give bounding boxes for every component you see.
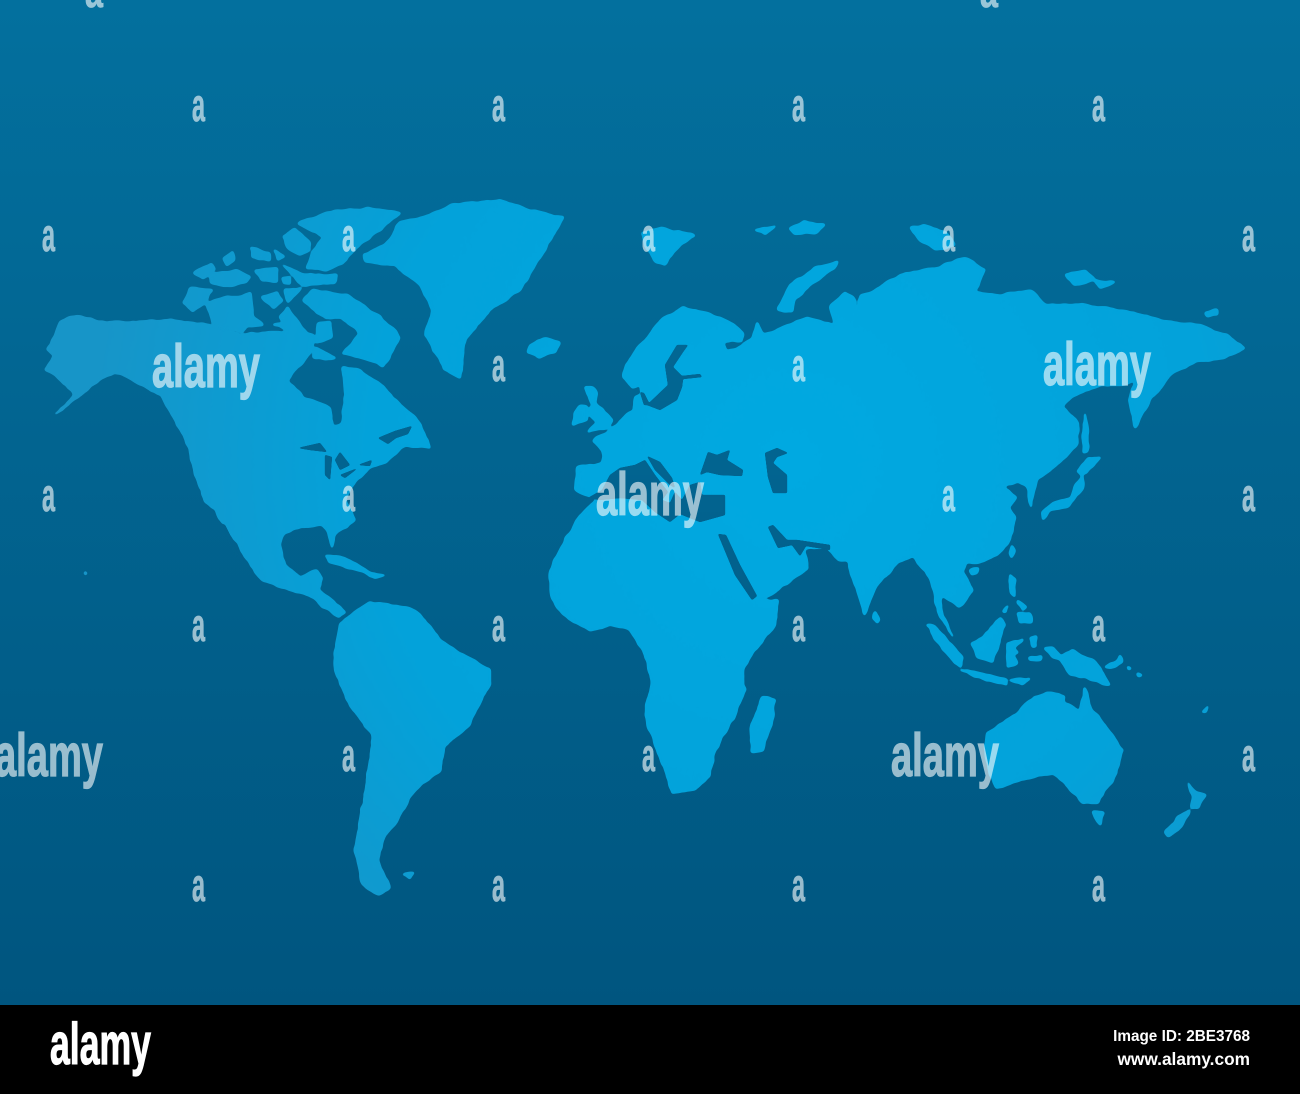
watermark: small repeated letters: a (642, 209, 655, 261)
island: Greenland (363, 200, 563, 378)
water: Gulf of St Lawrence (378, 426, 412, 444)
continent: North America (45, 307, 430, 618)
island: Tasmania (1092, 812, 1105, 825)
watermark: small repeated letters: a (342, 469, 355, 521)
water: Baltic Sea (647, 345, 702, 410)
watermark: small repeated letters: a (1242, 469, 1255, 521)
watermark: small repeated letters: a (792, 599, 805, 651)
water: Adriatic Sea (647, 456, 675, 488)
watermark: small repeated letters: a (42, 469, 55, 521)
watermark: small repeated letters: a (792, 859, 805, 911)
water: Caspian Sea (765, 448, 788, 493)
watermark: small repeated letters: a (1242, 209, 1255, 261)
watermark: small repeated letters: a (1242, 729, 1255, 781)
continent: South America (335, 602, 490, 895)
watermark: small repeated letters: a (192, 79, 205, 131)
watermark: large alamy logos: alamy (596, 461, 704, 528)
water: Kattegat (640, 392, 650, 405)
continent: Africa (550, 497, 778, 793)
watermark: small repeated letters: a (492, 599, 505, 651)
water: Great Lakes (298, 443, 372, 480)
islands: Arctic Eurasia (642, 222, 1218, 316)
watermark: large alamy logos: alamy (891, 722, 999, 789)
watermark: large alamy logos (0, 331, 1151, 789)
inland seas and water bodies (220, 345, 830, 600)
island: Australia (985, 688, 1122, 803)
watermark: small repeated letters: a (192, 599, 205, 651)
island: United Kingdom (585, 387, 612, 432)
watermark: large alamy logos: alamy (0, 722, 103, 789)
water: Persian Gulf (768, 525, 830, 556)
islands: Caribbean (325, 555, 385, 578)
watermark: small repeated letters: a (492, 859, 505, 911)
continent: Eurasia (575, 258, 1245, 637)
water: Red Sea (718, 534, 757, 600)
watermark: large alamy logos: alamy (1043, 331, 1151, 398)
watermark: small repeated letters: a (942, 209, 955, 261)
footer bar (0, 1005, 1300, 1094)
footer text: image id: Image ID: 2BE3768 (1113, 1028, 1250, 1045)
watermark: small repeated letters: a (492, 79, 505, 131)
islands: Canadian Arctic (183, 208, 400, 367)
watermark: small repeated letters: a (942, 469, 955, 521)
islands: Japan and East Asia (873, 413, 1100, 623)
watermark: small repeated letters: a (1092, 859, 1105, 911)
island: Ireland (573, 405, 587, 425)
watermark: small repeated letters: a (792, 79, 805, 131)
water: Gulf of California (220, 523, 240, 557)
watermark: small repeated letters: a (492, 339, 505, 391)
watermark: small repeated letters: a (792, 339, 805, 391)
islands: Hawaii and Falklands (84, 572, 413, 878)
islands: New Zealand (1165, 782, 1205, 837)
island: Iceland (528, 338, 560, 357)
world map (45, 200, 1245, 895)
watermark: large alamy logos: alamy (152, 333, 260, 400)
island: Madagascar (750, 697, 775, 752)
watermark: small repeated letters (42, 0, 1255, 911)
watermark: small repeated letters: a (342, 729, 355, 781)
water: Black Sea (700, 450, 743, 476)
water: Mediterranean Sea (588, 460, 725, 522)
watermark: small repeated letters: a (342, 209, 355, 261)
watermark: small repeated letters: a (42, 209, 55, 261)
footer text: website: www.alamy.com (1116, 1049, 1250, 1069)
islands: Southeast Asia and Pacific (927, 575, 1208, 712)
watermark: small repeated letters: a (1092, 79, 1105, 131)
footer logo: alamy: alamy (50, 1012, 151, 1077)
watermark: small repeated letters: a (642, 729, 655, 781)
watermark: small repeated letters: a (192, 859, 205, 911)
watermark: small repeated letters: a (1092, 599, 1105, 651)
